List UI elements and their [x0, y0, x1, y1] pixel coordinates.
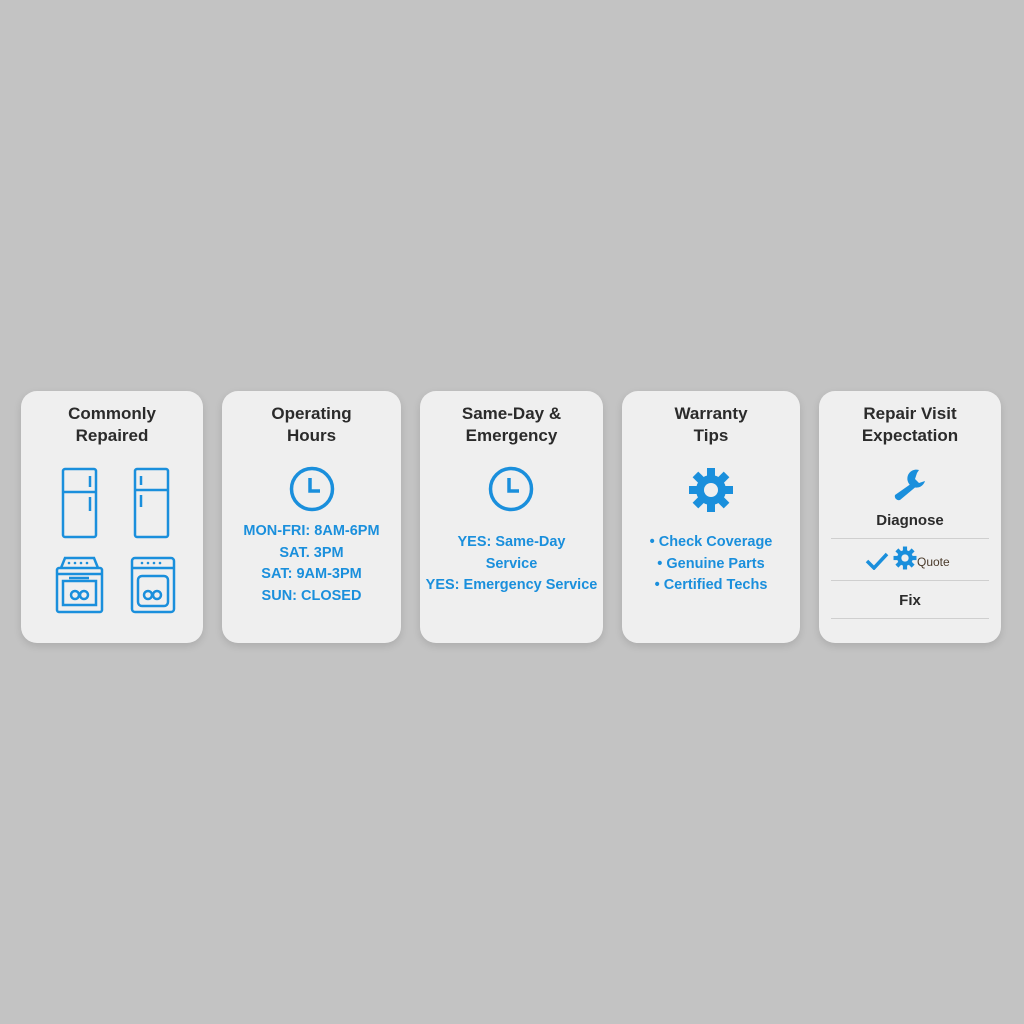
text: tips list: • Certified Techs — [655, 577, 767, 593]
text: diagnose: Diagnose — [876, 512, 944, 529]
heading: repair visit: Repair Visit — [863, 404, 957, 423]
icons: appliances — [56, 468, 176, 614]
text: tips list — [650, 534, 772, 593]
heading: same-day: Emergency — [466, 426, 557, 445]
text: hours: MON-FRI: 8AM-6PM — [243, 523, 380, 539]
panel: warranty tips — [622, 391, 800, 643]
panel: operating hours — [222, 391, 401, 643]
text: services — [426, 534, 597, 593]
heading: commonly repaired — [68, 404, 156, 445]
icon: check and gear quote: Quote — [917, 555, 950, 569]
icon: gear — [689, 468, 733, 512]
icon: clock — [488, 466, 534, 512]
heading: commonly repaired: Commonly — [68, 404, 156, 423]
heading: same-day: Same-Day & — [462, 404, 561, 423]
heading: commonly repaired: Repaired — [76, 426, 148, 445]
heading: warranty: Warranty — [674, 404, 748, 423]
text: hours: SAT: 9AM-3PM — [261, 566, 362, 582]
heading: operating hours: Hours — [287, 426, 336, 445]
panel: repair visit expectation — [819, 391, 1001, 643]
text: hours — [243, 523, 380, 604]
heading: repair visit — [862, 404, 958, 445]
icon: check and gear quote — [866, 546, 950, 570]
heading: operating hours: Operating — [271, 404, 352, 423]
panel: commonly repaired — [21, 391, 203, 643]
panel: same-day & emergency — [420, 391, 603, 643]
text: tips list: • Genuine Parts — [657, 556, 765, 572]
text: services: YES: Same-Day — [458, 534, 566, 550]
heading: warranty: Tips — [694, 426, 728, 445]
heading: operating hours — [271, 404, 352, 445]
text: fix: Fix — [899, 592, 921, 609]
icon: clock — [290, 466, 334, 512]
text: hours: SAT. 3PM — [279, 544, 344, 560]
text: tips list: • Check Coverage — [650, 534, 772, 550]
heading: warranty — [674, 404, 748, 445]
heading: same-day — [462, 404, 561, 445]
text: services: YES: Emergency Service — [426, 577, 597, 593]
heading: repair visit: Expectation — [862, 426, 958, 445]
text: hours: SUN: CLOSED — [262, 588, 361, 604]
icon: wrench — [894, 470, 925, 500]
text: services: Service — [486, 556, 537, 572]
